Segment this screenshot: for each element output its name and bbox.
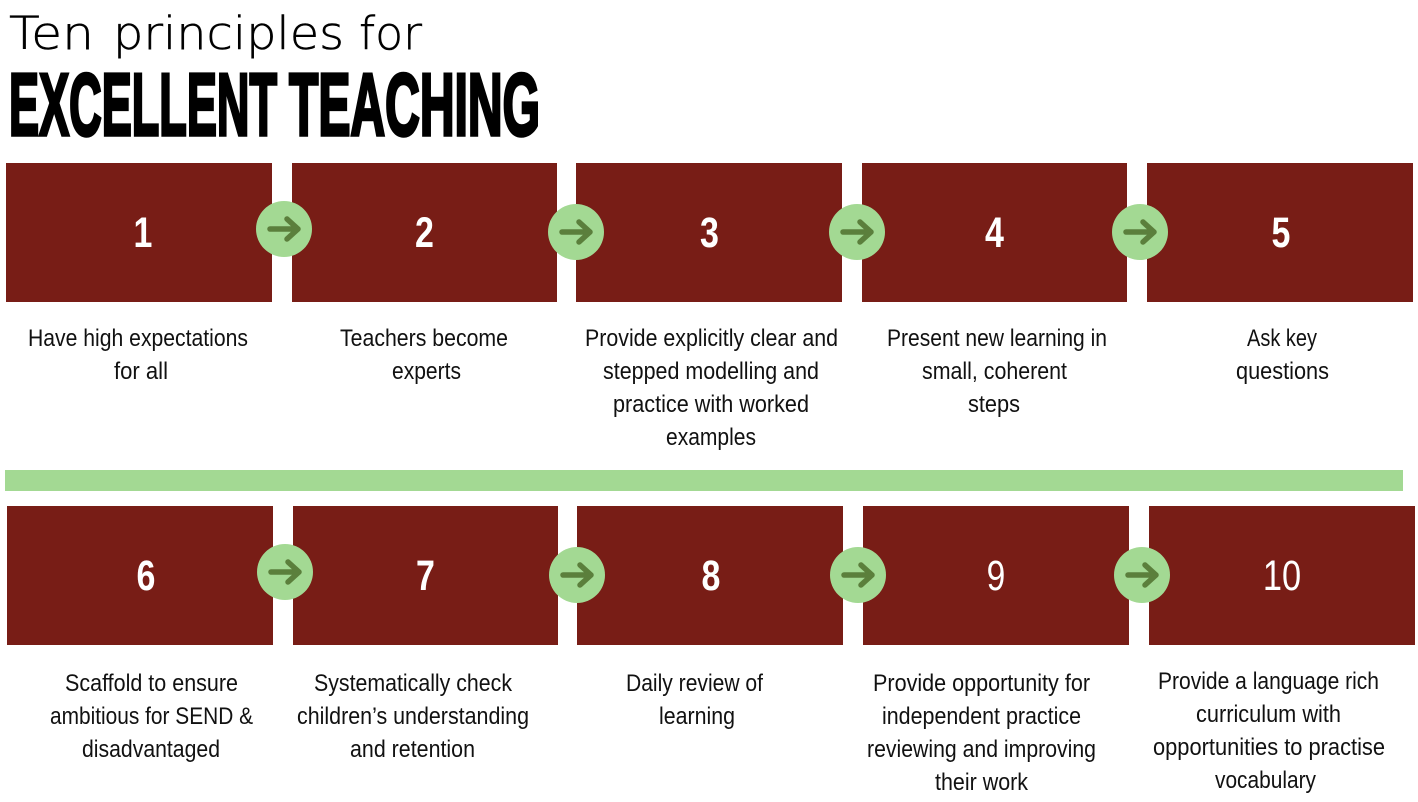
text: step 10: vocabulary xyxy=(1215,767,1317,794)
text: step 9 xyxy=(867,670,1096,796)
panel: step 5 box xyxy=(1147,163,1413,302)
text: step 7: children’s understanding xyxy=(297,703,529,730)
panel: step 9 box: 9 xyxy=(987,552,1005,600)
icon: arrow 6 to 7 xyxy=(257,544,313,600)
text: step 8: learning xyxy=(659,703,735,730)
panel: step 4 box xyxy=(862,163,1127,302)
text: step 8 xyxy=(626,670,763,730)
icon: arrow 7 to 8 xyxy=(549,547,605,603)
title xyxy=(9,7,540,154)
panel: step 3 box xyxy=(576,163,842,302)
panel: step 9 box xyxy=(863,506,1129,645)
panel: step 10 box xyxy=(1149,506,1415,645)
panel: step 6 box: 6 xyxy=(137,552,155,600)
text: step 9: Provide opportunity for xyxy=(873,670,1090,697)
icon: arrow 9 to 10 xyxy=(1114,547,1170,603)
title line 1: for xyxy=(359,7,423,60)
panel: step 6 box xyxy=(7,506,273,645)
panel: step 2 box: 2 xyxy=(415,209,434,257)
text: step 7: Systematically check xyxy=(314,670,513,697)
panel: step 1 box: 1 xyxy=(134,209,152,257)
icon: arrow 8 to 9 xyxy=(830,547,886,603)
text: step 8: Daily review of xyxy=(626,670,763,697)
text: step 7: and retention xyxy=(350,736,475,763)
text: step 6: disadvantaged xyxy=(82,736,220,763)
panel: step 3 box: 3 xyxy=(700,209,719,257)
text: step 3: examples xyxy=(666,424,756,451)
text: step 3: practice with worked xyxy=(613,391,809,418)
text: step 9: reviewing and improving xyxy=(867,736,1096,763)
text: step 3: Provide explicitly clear and xyxy=(585,325,838,352)
title line 2: EXCELLENT xyxy=(9,55,277,154)
panel: step 8 box xyxy=(577,506,843,645)
text: step 9: independent practice xyxy=(882,703,1081,730)
text: step 4: steps xyxy=(968,391,1020,418)
text: step 10 xyxy=(1153,668,1385,794)
panel: step 10 box: 10 xyxy=(1263,552,1301,600)
text: step 4: Present new learning in xyxy=(887,325,1107,352)
text: step 5: Ask key xyxy=(1247,325,1318,352)
text: step 6: ambitious for SEND & xyxy=(50,703,253,730)
panel: step 7 box xyxy=(293,506,558,645)
icon: arrow 3 to 4 xyxy=(829,204,885,260)
panel: step 1 box xyxy=(6,163,272,302)
panel: step 2 box xyxy=(292,163,557,302)
text: step 10: curriculum with xyxy=(1196,701,1341,728)
icon: arrow 4 to 5 xyxy=(1112,204,1168,260)
text: step 7 xyxy=(297,670,529,763)
title line 2: TEACHING xyxy=(289,55,540,154)
text: step 1 xyxy=(28,325,248,385)
text: step 9: their work xyxy=(935,769,1029,796)
title line 1: principles xyxy=(113,7,344,60)
text: step 6 xyxy=(50,670,253,763)
text: step 5 xyxy=(1236,325,1329,385)
icon: arrow 1 to 2 xyxy=(256,201,312,257)
panel: step 8 box: 8 xyxy=(702,552,720,600)
text: step 5: questions xyxy=(1236,358,1329,385)
title line 1 xyxy=(9,7,423,60)
text: step 1: for all xyxy=(114,358,168,385)
text: step 10: opportunities to practise xyxy=(1153,734,1385,761)
title line 1: Ten xyxy=(9,7,94,60)
text: step 3: stepped modelling and xyxy=(603,358,819,385)
divider bar xyxy=(5,470,1403,491)
text: step 3 xyxy=(585,325,838,451)
panel: step 7 box: 7 xyxy=(416,552,435,600)
text: step 6: Scaffold to ensure xyxy=(65,670,238,697)
text: step 2: experts xyxy=(392,358,461,385)
panel: step 5 box: 5 xyxy=(1272,209,1290,257)
text: step 4 xyxy=(887,325,1107,418)
text: step 4: small, coherent xyxy=(922,358,1067,385)
text: step 10: Provide a language rich xyxy=(1158,668,1379,695)
panel: step 4 box: 4 xyxy=(985,209,1004,257)
text: step 1: Have high expectations xyxy=(28,325,248,352)
text: step 2: Teachers become xyxy=(340,325,508,352)
text: step 2 xyxy=(340,325,508,385)
icon: arrow 2 to 3 xyxy=(548,204,604,260)
